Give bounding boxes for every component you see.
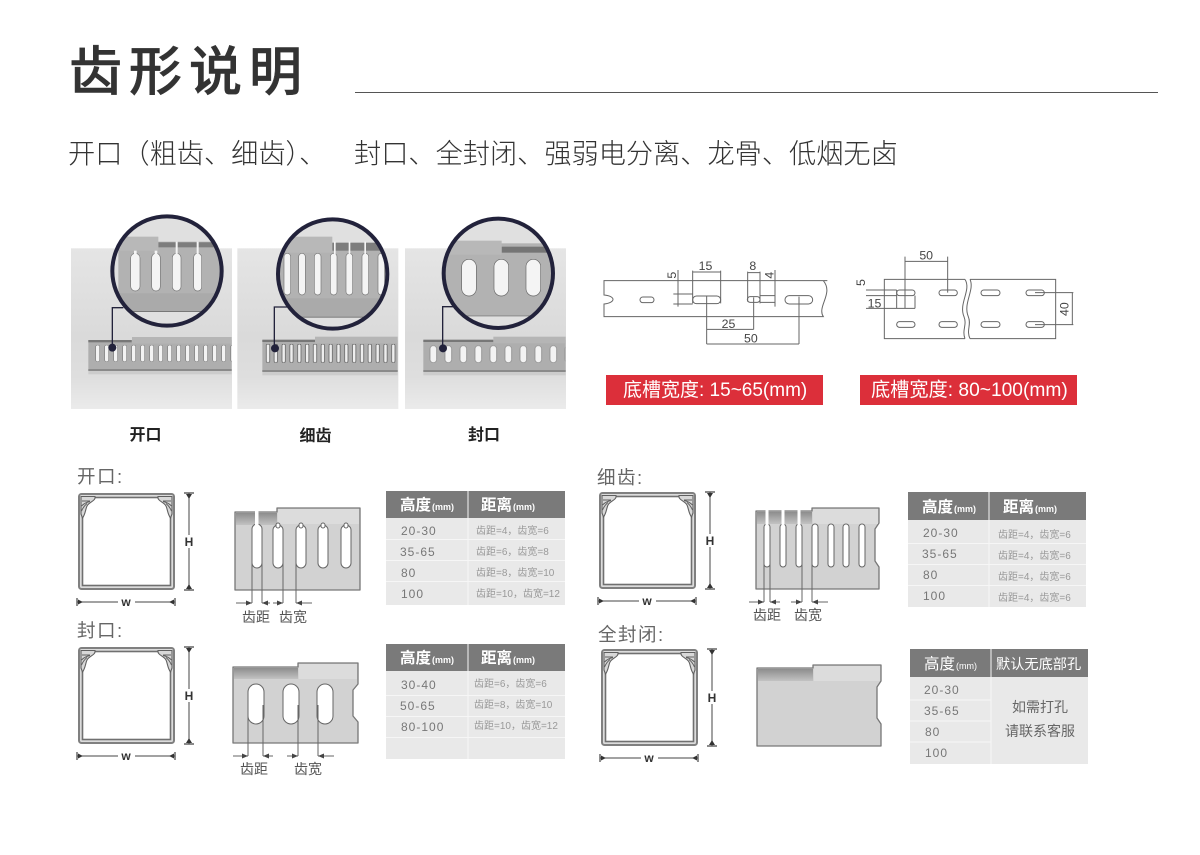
icon: fine tooth cross section: w: [641, 594, 652, 608]
table: open slot: 齿距=10，齿宽=12: [476, 587, 560, 600]
table: fully closed: 如需打孔: [1012, 699, 1068, 715]
diagram: fine tooth rail: [749, 508, 879, 623]
diagram: fully closed rail: [757, 665, 881, 746]
section: fully closed: 全封闭:: [598, 624, 665, 645]
photo: closed slot: [405, 217, 566, 409]
icon: fully closed cross section: H: [708, 691, 716, 705]
technical drawing: 80-100 mm base: 40: [1058, 302, 1072, 316]
table: fully closed: 80: [925, 725, 940, 739]
section: closed slot: [77, 620, 565, 777]
technical drawing: 15-65 mm base: 50: [744, 332, 758, 346]
table: fine tooth: 100: [923, 589, 946, 603]
table: fine tooth: 距离(mm): [1003, 497, 1057, 516]
section: open slot: [77, 466, 565, 625]
technical drawing: 15-65 mm base: 8: [749, 259, 756, 273]
table: fully closed: 35-65: [924, 704, 960, 718]
table: fully closed: 请联系客服: [1005, 723, 1075, 739]
diagram: fine tooth rail: 齿宽: [794, 607, 822, 623]
table: fine tooth: 齿距=4，齿宽=6: [998, 528, 1071, 541]
technical drawing: 15-65 mm base: 4: [762, 272, 776, 279]
diagram: open slot rail: 齿宽: [279, 609, 307, 625]
technical drawing: 15-65 mm base: 25: [722, 317, 736, 331]
photo: open tooth: [71, 213, 232, 409]
table: open slot: 距离(mm): [481, 495, 535, 514]
icon: open slot cross section: w: [120, 595, 131, 609]
photo captions: [129, 426, 500, 445]
icon: fine tooth cross section: H: [706, 534, 714, 548]
icon: open slot cross section: H: [185, 535, 193, 549]
icon: fully closed cross section: [600, 649, 717, 765]
icon: closed slot cross section: [77, 647, 194, 763]
technical drawing: 15-65 mm base: 5: [665, 272, 679, 279]
callout: base width 80-100: [860, 375, 1077, 405]
table: fully closed: 默认无底部孔: [996, 657, 1081, 673]
photo: fine tooth: [237, 217, 398, 409]
table: fine tooth: 20-30: [923, 526, 959, 540]
table: closed slot: 50-65: [400, 699, 436, 713]
table: fully closed: 20-30: [924, 683, 960, 697]
technical drawing: 15-65 mm base: [604, 259, 827, 346]
diagram: open slot rail: 齿距: [242, 609, 270, 625]
icon: closed slot cross section: H: [185, 689, 193, 703]
table: fully closed: [910, 649, 1088, 764]
title: 齿形说明: [69, 30, 309, 106]
callout: base width 15-65: 底槽宽度: 15~65(mm): [623, 379, 807, 401]
subtitle: product types: 封口、全封闭、强弱电分离、龙骨、低烟无卤: [354, 138, 898, 169]
table: open slot: 齿距=8，齿宽=10: [476, 566, 555, 579]
subtitle: product types: [68, 138, 898, 169]
table: closed slot: 齿距=10，齿宽=12: [474, 719, 558, 732]
table: open slot: 高度(mm): [400, 495, 454, 514]
table: open slot: 20-30: [401, 524, 437, 538]
table: fine tooth: [908, 492, 1086, 607]
table: closed slot: 齿距=6，齿宽=6: [474, 677, 547, 690]
table: fine tooth: 80: [923, 568, 938, 582]
icon: fine tooth cross section: [598, 492, 715, 608]
diagram: fine tooth rail: 齿距: [753, 607, 781, 623]
section: closed slot: 封口:: [77, 620, 124, 641]
table: closed slot: 30-40: [401, 678, 437, 692]
photo captions: 开口: [129, 427, 162, 444]
technical drawing: 15-65 mm base: 15: [699, 259, 713, 273]
table: fully closed: 100: [925, 746, 948, 760]
table: fully closed: 高度(mm): [924, 655, 977, 673]
table: fine tooth: 高度(mm): [922, 497, 976, 516]
diagram: open slot rail: [235, 508, 360, 625]
panel: tooth type photos: [71, 213, 566, 409]
section: fully closed: [598, 624, 1088, 765]
diagram: closed slot rail: 齿距: [240, 761, 268, 777]
section: fine tooth: 细齿:: [597, 467, 644, 488]
section: fine tooth: [597, 467, 1086, 623]
technical drawing: 80-100 mm base: 5: [854, 279, 868, 286]
table: closed slot: 高度(mm): [400, 648, 454, 667]
photo captions: 封口: [468, 426, 500, 444]
table: open slot: [386, 491, 565, 605]
photo captions: 细齿: [299, 427, 332, 445]
table: open slot: 100: [401, 587, 424, 601]
callout: base width 15-65: [606, 375, 823, 405]
table: fine tooth: 齿距=4，齿宽=6: [998, 549, 1071, 562]
table: open slot: 80: [401, 566, 416, 580]
technical drawing: 80-100 mm base: 50: [919, 248, 933, 262]
technical drawing: 80-100 mm base: 15: [868, 297, 882, 311]
technical drawing: 80-100 mm base: [854, 248, 1073, 339]
table: fine tooth: 齿距=4，齿宽=6: [998, 570, 1071, 583]
table: closed slot: [386, 644, 565, 759]
table: closed slot: 80-100: [401, 720, 444, 734]
table: fine tooth: 齿距=4，齿宽=6: [998, 591, 1071, 604]
section: open slot: 开口:: [77, 466, 124, 487]
icon: open slot cross section: [77, 493, 194, 609]
diagram: closed slot rail: 齿宽: [294, 761, 322, 777]
table: closed slot: 齿距=8，齿宽=10: [474, 698, 553, 711]
diagram: closed slot rail: [233, 663, 358, 777]
callout: base width 80-100: 底槽宽度: 80~100(mm): [871, 379, 1068, 401]
table: closed slot: 距离(mm): [481, 648, 535, 667]
icon: closed slot cross section: w: [120, 749, 131, 763]
table: fine tooth: 35-65: [922, 547, 958, 561]
table: open slot: 齿距=6，齿宽=8: [476, 545, 549, 558]
table: open slot: 齿距=4，齿宽=6: [476, 524, 549, 537]
table: open slot: 35-65: [400, 545, 436, 559]
subtitle: product types: 开口（粗齿、细齿）、: [68, 138, 326, 169]
icon: fully closed cross section: w: [643, 751, 654, 765]
